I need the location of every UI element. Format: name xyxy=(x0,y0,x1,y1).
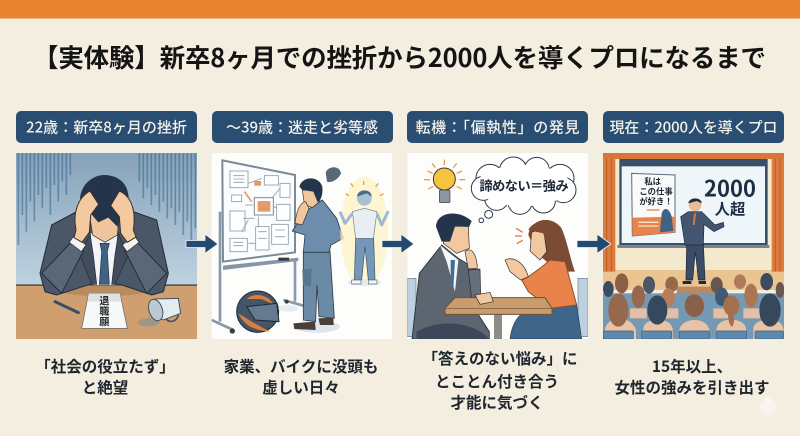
projection screen xyxy=(617,159,769,248)
caption 3 xyxy=(422,347,578,413)
caption 2 xyxy=(224,355,378,398)
face xyxy=(89,213,119,242)
audience xyxy=(603,273,784,339)
back row xyxy=(603,273,784,339)
arrow 1 xyxy=(186,234,218,254)
caption 1 xyxy=(35,355,175,398)
curtains xyxy=(603,153,784,272)
step heading 4: 現在：2000人を導くプロ xyxy=(610,116,778,138)
caption 2: 家業、バイクに没頭も xyxy=(224,355,378,377)
top accent bar xyxy=(0,0,800,18)
light bulb xyxy=(424,160,465,203)
step heading 1 xyxy=(16,111,197,143)
projection screen: 人超 xyxy=(715,198,746,220)
chairs xyxy=(407,278,588,337)
sparkle mark xyxy=(758,395,778,418)
middle row xyxy=(630,284,760,318)
man in work jacket xyxy=(292,178,343,330)
title: 【実体験】新卒8ヶ月での挫折から2000人を導くプロになるまで xyxy=(33,38,766,75)
caption 2: 虚しい日々 xyxy=(262,376,340,398)
thought bubble xyxy=(471,157,576,223)
resignation paper xyxy=(82,293,127,328)
step heading 1: 22歳：新卒8ヶ月の挫折 xyxy=(26,116,187,138)
resignation paper: 願 xyxy=(99,316,109,328)
step heading 2: ～39歳：迷走と劣等感 xyxy=(226,116,378,138)
hands xyxy=(74,191,99,242)
book cover: 私は xyxy=(644,176,662,186)
book cover xyxy=(632,173,675,236)
caption 3: とことん付き合う xyxy=(435,370,559,392)
helmet xyxy=(237,291,279,332)
thought: small helmet xyxy=(326,167,341,182)
resignation paper: 退 xyxy=(99,294,109,307)
caption 3: 「答えのない悩み」に xyxy=(422,347,578,369)
caption 4: 女性の強みを引き出す xyxy=(614,376,770,398)
panel: resignation despair illustration xyxy=(16,153,197,339)
suit xyxy=(40,212,168,295)
panel: seminar presentation illustration xyxy=(603,153,784,339)
tipped cup xyxy=(137,297,181,326)
woman in orange top xyxy=(505,220,582,339)
speaker xyxy=(681,198,724,284)
hair xyxy=(80,175,129,227)
arrow 3 xyxy=(577,234,611,254)
pen xyxy=(55,302,78,313)
rain streaks xyxy=(18,153,195,245)
caption 4: 15年以上、 xyxy=(652,355,732,377)
panel: counseling discovery illustration xyxy=(407,153,588,339)
thought bubble: 諦めない＝強み xyxy=(479,179,569,194)
glowing peer xyxy=(340,181,388,286)
book cover: この仕事 xyxy=(639,186,673,196)
caption 1: と絶望 xyxy=(82,376,128,398)
caption 3: 才能に気づく xyxy=(450,391,544,413)
resignation paper: 職 xyxy=(99,305,109,318)
caption 1: 「社会の役立たず」 xyxy=(35,355,175,377)
step heading 3 xyxy=(407,111,588,143)
panel: wandering at whiteboard illustration xyxy=(212,153,392,339)
book cover: が好き！ xyxy=(639,196,673,206)
whiteboard xyxy=(222,160,298,270)
step heading 2 xyxy=(212,111,393,143)
projection screen: 2000 xyxy=(704,172,756,204)
front row xyxy=(603,293,783,339)
man in suit xyxy=(412,213,489,339)
arrow 2 xyxy=(382,234,414,254)
step heading 4 xyxy=(603,111,784,143)
glow xyxy=(340,177,388,287)
whiteboard stand xyxy=(212,212,303,330)
caption 4 xyxy=(614,355,770,398)
table xyxy=(445,292,552,339)
step heading 3: 転機：「偏執性」の発見 xyxy=(416,116,580,138)
